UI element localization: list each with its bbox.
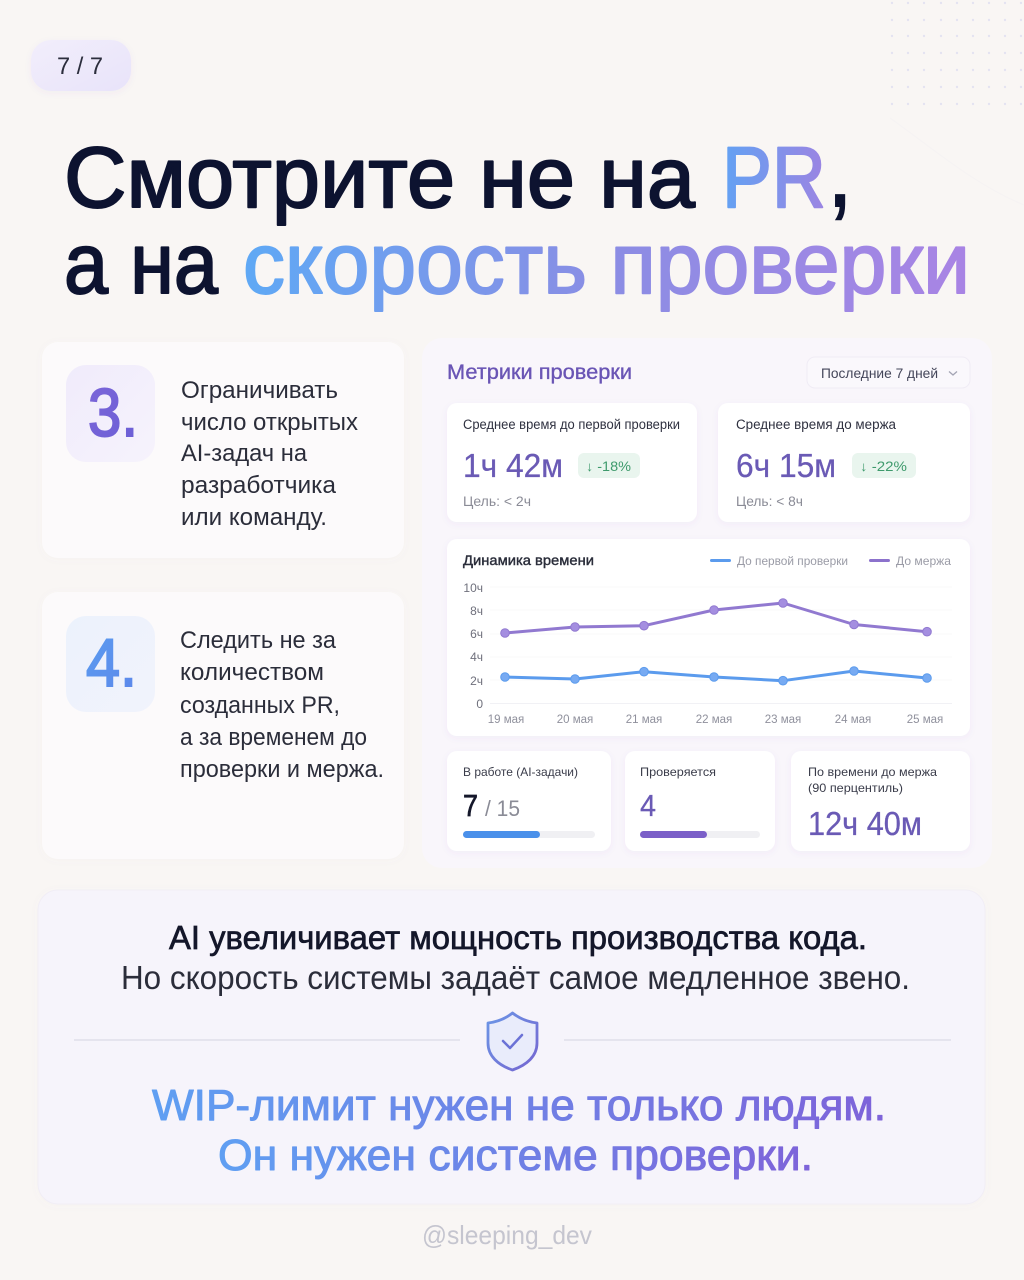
series: to first review (501, 667, 931, 685)
text: step 3: разработчика (181, 472, 337, 499)
dropdown: period (807, 357, 970, 388)
x axis labels: 23 мая (765, 714, 801, 726)
card: time to first review: Цель: < 2ч (463, 493, 531, 509)
x axis labels: 24 мая (835, 714, 871, 726)
x axis labels: 22 мая (696, 714, 732, 726)
x axis labels: 21 мая (626, 714, 662, 726)
callout: WIP limit: Он нужен системе проверки. (218, 1131, 813, 1180)
text: step 4 (180, 627, 384, 783)
text: conclusion statement (121, 919, 910, 996)
y axis labels (463, 581, 483, 711)
line chart: time dynamics: Динамика времени (463, 552, 594, 568)
text: step 4: а за временем до (180, 724, 367, 751)
text: step 4: проверки и мержа. (180, 756, 384, 783)
card: time to first review: Среднее время до первой проверки (463, 417, 680, 432)
card: in progress: 7 (463, 788, 478, 823)
dropdown: period: Последние 7 дней (821, 365, 938, 381)
card: time to first review: 1ч 42м (463, 447, 563, 484)
callout: WIP limit (152, 1081, 886, 1180)
panel: step 3 (42, 342, 404, 558)
card: 90th percentile: 12ч 40м (808, 805, 922, 842)
icon: number 3 (66, 365, 155, 462)
badge: minus 22 percent (852, 453, 916, 478)
y axis labels: 0 (476, 697, 483, 711)
title: Смотрите не на (64, 130, 695, 226)
x axis labels: 20 мая (557, 714, 593, 726)
badge: minus 18 percent (578, 453, 640, 478)
text: step 3: или команду. (181, 504, 327, 531)
y axis labels: 6ч (470, 627, 483, 641)
card: under review: Проверяется (640, 765, 716, 779)
heading: metrics: Метрики проверки (447, 361, 632, 384)
line chart: time dynamics (447, 539, 970, 736)
card: under review: 4 (640, 788, 656, 823)
text: conclusion statement: AI увеличивает мощность производства кода. (169, 919, 867, 956)
chart legend (710, 554, 951, 568)
text: conclusion statement: Но скорость системы задаёт самое медленное звено. (121, 959, 910, 996)
card: time to merge: Цель: < 8ч (736, 493, 803, 509)
panel: review metrics dashboard (422, 338, 992, 868)
page counter pill: 7 / 7 (57, 53, 103, 80)
card: under review (625, 751, 775, 851)
icon: shield with check (488, 1013, 537, 1070)
badge: minus 22 percent: ↓ -22% (860, 459, 907, 474)
text: step 4: Следить не за (180, 627, 337, 654)
card: 90th percentile (791, 751, 970, 851)
card: 90th percentile: По времени до мержа (808, 765, 937, 779)
icon: number 3: 3. (88, 375, 138, 451)
y axis labels: 10ч (463, 581, 483, 595)
series: to merge (501, 599, 931, 637)
card: time to merge (718, 403, 970, 522)
icon: number 4: 4. (86, 625, 137, 701)
panel: step 4 (42, 592, 404, 859)
chart legend: До первой проверки (737, 554, 848, 568)
title: , (830, 130, 850, 226)
title: скорость проверки (243, 216, 970, 312)
y axis labels: 2ч (470, 674, 483, 688)
card: in progress: / 15 (485, 796, 520, 821)
text: step 4: количеством (180, 659, 324, 686)
card: time to merge: Среднее время до мержа (736, 417, 896, 432)
card: time to first review (447, 403, 697, 522)
chart legend: До мержа (896, 554, 951, 568)
dot pattern decoration (890, 2, 1024, 205)
x axis labels: 25 мая (907, 714, 943, 726)
panel: conclusion (38, 890, 985, 1204)
y axis labels: 4ч (470, 650, 483, 664)
card: in progress (447, 751, 611, 851)
text: step 3: Ограничивать (181, 377, 338, 404)
card: time to merge: 6ч 15м (736, 447, 836, 484)
icon: number 4 (66, 616, 155, 712)
title (64, 130, 970, 312)
card: 90th percentile: (90 перцентиль) (808, 781, 903, 795)
badge: minus 18 percent: ↓ -18% (586, 459, 631, 474)
author handle: @sleeping_dev (422, 1220, 592, 1250)
x axis labels (488, 714, 943, 726)
y axis labels: 8ч (470, 604, 483, 618)
callout: WIP limit: WIP-лимит нужен не только людям. (152, 1081, 886, 1130)
text: step 4: созданных PR, (180, 692, 340, 719)
title: а на (64, 216, 218, 312)
text: step 3: число открытых (181, 409, 358, 436)
card: in progress: В работе (AI-задачи) (463, 765, 578, 779)
title: PR (722, 130, 826, 226)
text: step 3: AI-задач на (181, 440, 308, 467)
page counter pill (31, 40, 131, 91)
x axis labels: 19 мая (488, 714, 524, 726)
text: step 3 (181, 377, 358, 531)
